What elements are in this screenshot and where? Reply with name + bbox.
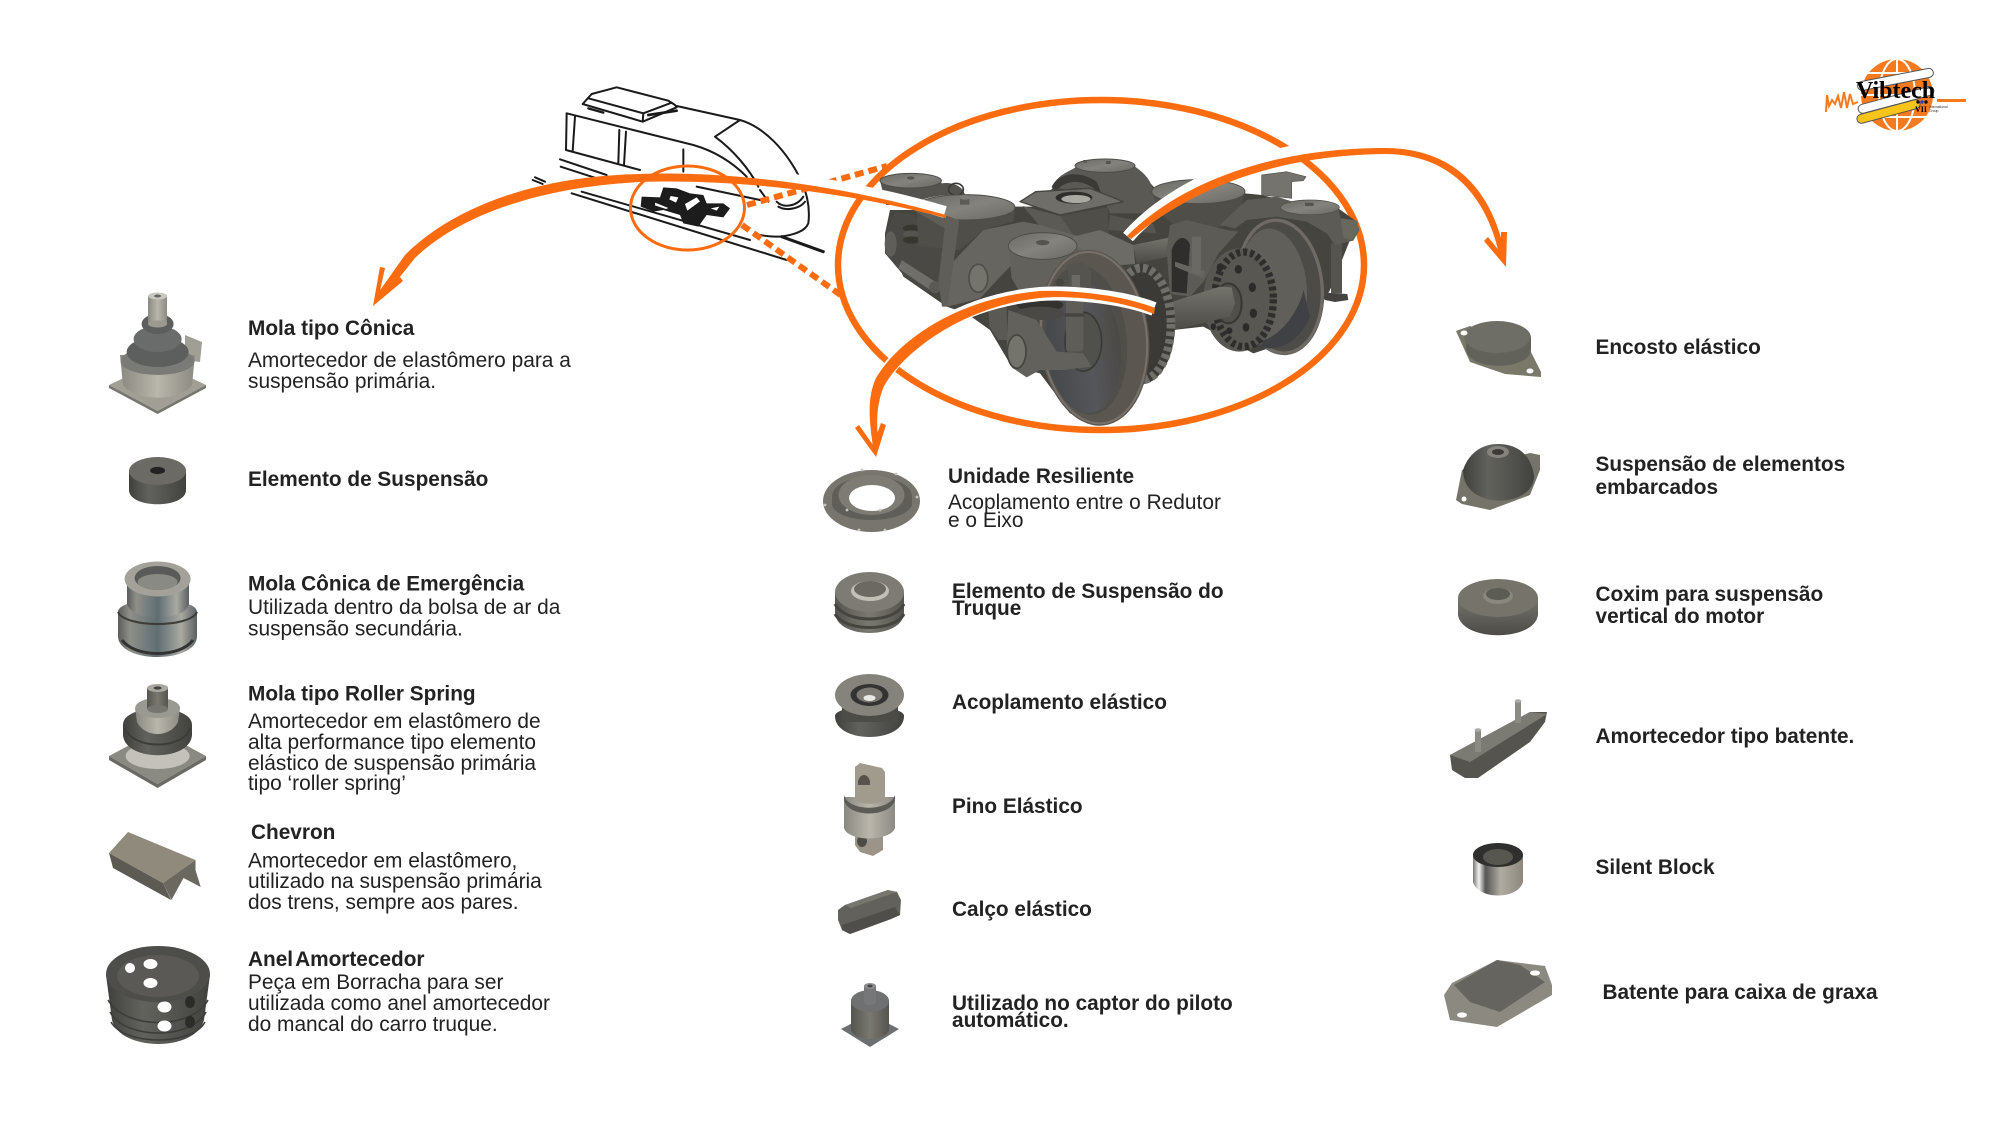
left spring and side plate assembly — [885, 212, 945, 293]
item: Mola tipo Cônica — [109, 292, 571, 414]
description — [248, 850, 542, 914]
left bracket — [913, 210, 959, 307]
icon: damper ring — [106, 946, 210, 1044]
heading: Silent Block — [1596, 856, 1715, 879]
heading: Chevron — [251, 821, 335, 844]
small circle marking the train bogie — [630, 166, 744, 250]
description — [248, 710, 541, 795]
description: suspensão primária. — [248, 370, 436, 393]
description — [248, 349, 571, 393]
right frame and bracket — [1220, 172, 1359, 245]
arrow: curved arrow to center column — [855, 291, 1155, 457]
icon: bogie suspension element — [835, 572, 904, 633]
description: elástico de suspensão primária — [248, 752, 536, 775]
frame round plate — [969, 264, 988, 292]
icon: miniature bogie on the train — [641, 187, 730, 227]
item: Elemento de Suspensão — [129, 457, 488, 504]
description: Amortecedor em elastômero de — [248, 710, 541, 733]
front lower suspension — [988, 293, 1092, 377]
icon: conical spring — [109, 292, 206, 414]
heading: Elemento de Suspensão — [248, 468, 488, 491]
icon: elastic wedge — [838, 890, 901, 934]
arrow: curved arrow to right column — [1127, 148, 1507, 267]
item: Mola tipo Roller Spring — [109, 682, 541, 795]
heading: Pino Elástico — [952, 795, 1083, 818]
icon: elastic stop — [1456, 321, 1541, 377]
description: Acoplamento entre o Redutor — [948, 491, 1221, 514]
dashed connector lines from train to bogie — [742, 166, 887, 296]
description: utilizada como anel amortecedor — [248, 992, 550, 1015]
item: Acoplamento elástico — [835, 674, 1167, 737]
item: Suspensão de elementos embarcados — [1456, 444, 1845, 510]
heading: Elemento de Suspensão do — [952, 580, 1224, 603]
logo: Vibtech — [1826, 59, 1966, 131]
description: tipo ‘roller spring’ — [248, 772, 406, 795]
rear right pot — [1152, 178, 1245, 230]
icon: roller spring — [109, 684, 206, 788]
description — [248, 596, 561, 640]
front brake disc — [1108, 264, 1175, 384]
bogie illustration — [880, 159, 1359, 431]
description: e o Eixo — [948, 509, 1023, 532]
axle — [1165, 287, 1235, 331]
icon: silent block — [1473, 843, 1523, 896]
icon: autopilot sensor mount — [841, 983, 899, 1047]
icon: rubber cylinder — [129, 457, 186, 504]
front wheel — [1030, 244, 1158, 431]
left arrowhead — [373, 267, 403, 306]
item: Batente para caixa de graxa — [1444, 960, 1878, 1027]
icon: chevron — [109, 832, 201, 900]
heading: Anel Amortecedor — [248, 948, 425, 971]
heading: Mola tipo Roller Spring — [248, 682, 476, 706]
central frame — [947, 222, 1135, 307]
heading: automático. — [952, 1009, 1069, 1032]
rear brake disc — [1203, 248, 1275, 352]
bogie dark backing silhouette — [885, 167, 1357, 423]
right suspension rod — [1325, 243, 1348, 302]
heading — [1596, 583, 1823, 628]
description: do mancal do carro truque. — [248, 1013, 498, 1036]
front axle box — [1008, 233, 1078, 293]
description: suspensão secundária. — [248, 618, 463, 640]
heading: Amortecedor tipo batente. — [1596, 725, 1854, 748]
right arrowhead — [1484, 232, 1507, 267]
item: Pino Elástico — [844, 763, 1083, 856]
heading: vertical do motor — [1596, 605, 1764, 628]
train line drawing — [533, 87, 823, 260]
description — [948, 491, 1221, 532]
item: Chevron — [109, 821, 542, 914]
heading: Encosto elástico — [1596, 336, 1761, 359]
icon: resilient unit — [823, 469, 920, 532]
heading: embarcados — [1596, 476, 1718, 499]
heading: Batente para caixa de graxa — [1602, 981, 1878, 1004]
center block — [1073, 230, 1135, 265]
icon: grease box stop — [1444, 960, 1552, 1027]
rear center pot — [1052, 159, 1157, 213]
description: Amortecedor de elastômero para a — [248, 349, 571, 372]
heading: Truque — [952, 597, 1021, 620]
heading — [952, 580, 1224, 620]
item: Captor — [841, 983, 1233, 1047]
logo group mark: VII — [1915, 105, 1927, 114]
rear wheel — [1229, 214, 1331, 360]
heading: Utilizado no captor do piloto — [952, 992, 1233, 1015]
description: utilizado na suspensão primária — [248, 870, 542, 893]
heading: Acoplamento elástico — [952, 691, 1167, 714]
heading — [1596, 453, 1845, 499]
description: Amortecedor em elastômero, — [248, 850, 517, 872]
logo coil bands — [1856, 68, 1935, 124]
logo group mark — [1915, 100, 1948, 114]
central brake and tube mechanism — [1108, 215, 1238, 297]
heading: Unidade Resiliente — [948, 465, 1134, 488]
icon: elastic pin — [844, 763, 895, 856]
logo group mark: Group — [1929, 109, 1939, 113]
item: Mola Cônica de Emergência — [118, 562, 561, 657]
left large pot — [915, 195, 1015, 250]
item: Silent Block — [1473, 843, 1715, 896]
item: Coxim para suspensão vertical do motor — [1458, 579, 1823, 635]
logo waveform — [1826, 92, 1858, 112]
description: dos trens, sempre aos pares. — [248, 891, 519, 914]
center square mount — [1020, 188, 1123, 235]
item: Elemento de Suspensão do Truque — [835, 572, 1224, 633]
center arrowhead — [855, 423, 886, 457]
item: Amortecedor tipo batente — [1450, 699, 1854, 778]
heading: Calço elástico — [952, 898, 1092, 921]
logo wordmark: Vibtech — [1856, 78, 1935, 104]
description: Peça em Borracha para ser — [248, 971, 503, 994]
icon: elastic coupling — [835, 674, 904, 737]
heading: Mola tipo Cônica — [248, 317, 415, 340]
arrow: curved arrow to left column — [373, 174, 946, 306]
item: Anel Amortecedor — [106, 946, 550, 1044]
logo group mark: International — [1929, 105, 1948, 109]
description — [248, 971, 550, 1036]
item: Calço elástico — [838, 890, 1092, 934]
rear left pot — [880, 173, 965, 205]
front clamp detail — [1056, 262, 1092, 290]
description: alta performance tipo elemento — [248, 731, 536, 754]
icon: onboard mount — [1456, 444, 1540, 510]
icon: bump stop damper — [1450, 699, 1547, 778]
heading: Mola Cônica de Emergência — [248, 572, 525, 596]
large ellipse around bogie — [838, 100, 1364, 430]
item: Encosto elástico — [1456, 321, 1761, 377]
item: Unidade Resiliente — [823, 465, 1221, 532]
icon: motor mount — [1458, 579, 1538, 635]
logo globe — [1861, 59, 1933, 131]
heading: Coxim para suspensão — [1596, 583, 1823, 606]
description: Utilizada dentro da bolsa de ar da — [248, 596, 561, 619]
icon: emergency conical spring — [118, 562, 197, 657]
heading — [952, 992, 1233, 1032]
heading: Suspensão de elementos — [1596, 453, 1845, 476]
